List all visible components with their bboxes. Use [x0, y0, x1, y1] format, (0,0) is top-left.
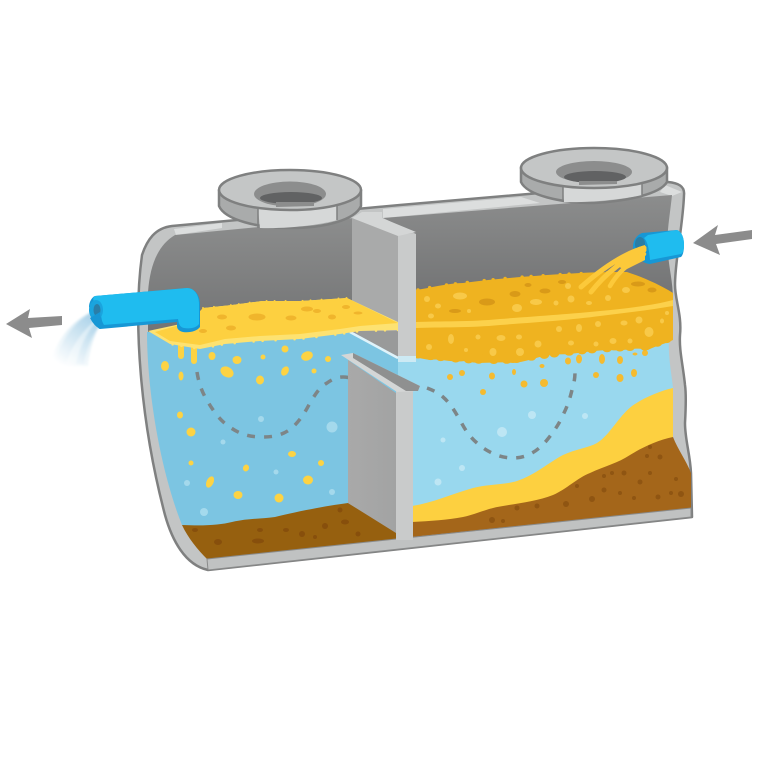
right inflow arrow [693, 225, 752, 255]
tank top rim highlight [174, 185, 682, 235]
outlet pipe [89, 288, 200, 332]
left chamber floating particles [161, 340, 331, 502]
inflow stream [581, 245, 645, 292]
right flow path dashed line [427, 372, 575, 458]
right scum layer [416, 272, 673, 363]
upper baffle side panel [350, 218, 398, 358]
right water chamber [398, 340, 673, 525]
left outflow arrow [6, 309, 62, 338]
lower baffle [341, 353, 420, 540]
left chamber bubbles [184, 416, 338, 516]
left floating scum layer [148, 298, 398, 349]
left manhole collar [219, 170, 361, 228]
tank outer shell [138, 182, 692, 570]
left compartment back wall [148, 218, 354, 335]
left flow path dashed line [197, 372, 378, 437]
right manhole collar [521, 148, 667, 203]
right chamber bubbles [434, 411, 588, 486]
left sludge layer [182, 503, 396, 559]
outflow water stream [50, 308, 104, 366]
right compartment back wall [383, 195, 673, 300]
upper baffle front strip and cap [352, 212, 416, 362]
right yellow settled layer [412, 388, 673, 535]
inlet pipe [633, 230, 684, 264]
right sludge layer [412, 437, 691, 537]
left water chamber [147, 332, 399, 559]
tank floor rim [207, 508, 691, 570]
right chamber particles [447, 350, 648, 395]
